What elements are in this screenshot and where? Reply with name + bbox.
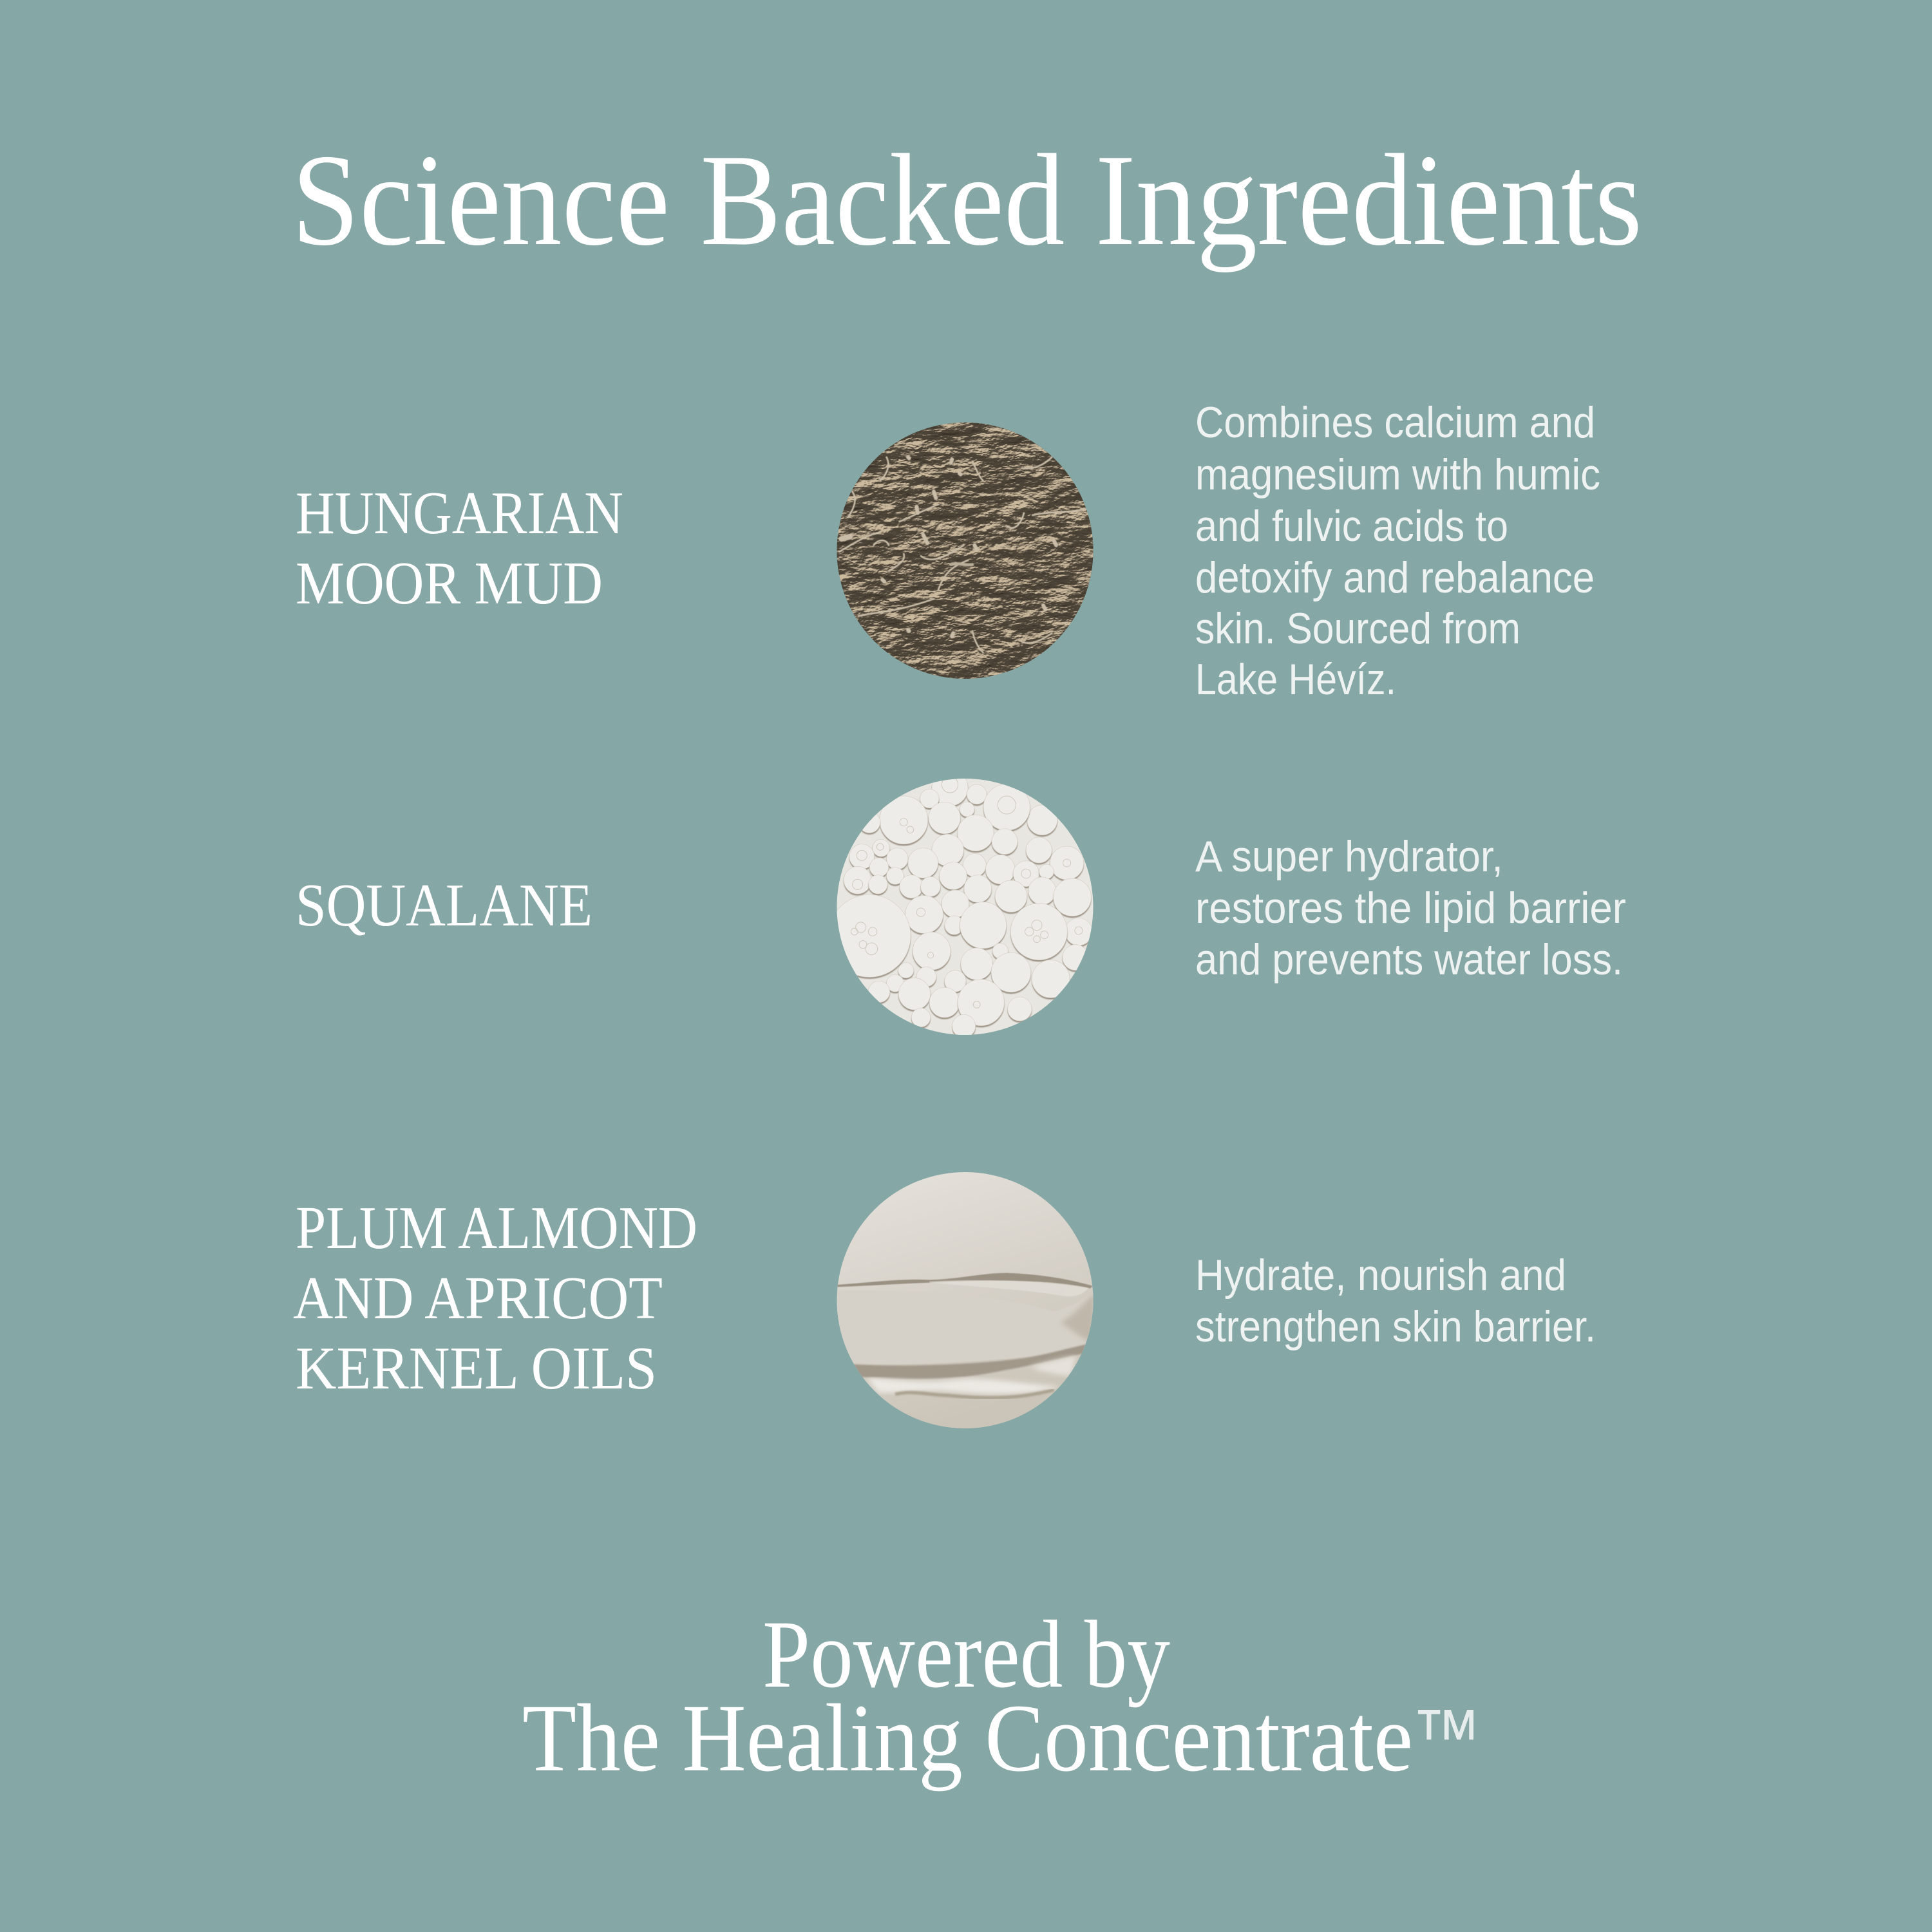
description: Hungarian moor mud bbox=[1195, 398, 1600, 704]
label: Plum almond and apricot kernel oils: KERNEL OILS bbox=[296, 1335, 657, 1402]
label: Hungarian moor mud bbox=[296, 480, 623, 617]
description: Squalane bbox=[1195, 832, 1626, 984]
label: Plum almond and apricot kernel oils: AND APRICOT bbox=[293, 1265, 663, 1332]
footer heading: ™ bbox=[1412, 1693, 1481, 1781]
description: oils bbox=[1195, 1251, 1596, 1351]
footer heading: Powered by bbox=[762, 1601, 1170, 1708]
description: Squalane: restores the lipid barrier bbox=[1195, 884, 1626, 933]
description: oils: strengthen skin barrier. bbox=[1195, 1302, 1596, 1351]
description: Hungarian moor mud: magnesium with humic bbox=[1195, 450, 1600, 499]
label: Plum almond and apricot kernel oils bbox=[293, 1195, 697, 1402]
image: mud texture circle bbox=[834, 420, 1096, 682]
label: Squalane: SQUALANE bbox=[296, 872, 592, 939]
footer heading: The Healing Concentrate bbox=[522, 1685, 1413, 1792]
description: oils: Hydrate, nourish and bbox=[1195, 1251, 1566, 1300]
description: Hungarian moor mud: Combines calcium and bbox=[1195, 398, 1595, 447]
row: Hungarian moor mud bbox=[296, 398, 1600, 704]
label: Plum almond and apricot kernel oils: PLUM ALMOND bbox=[296, 1195, 697, 1262]
row: Plum almond and apricot kernel oils bbox=[293, 1169, 1596, 1431]
description: Hungarian moor mud: detoxify and rebalance bbox=[1195, 553, 1595, 602]
image: oil surface circle bbox=[834, 1169, 1096, 1431]
title: Science Backed Ingredients bbox=[292, 128, 1642, 273]
description: Squalane: and prevents water loss. bbox=[1195, 935, 1623, 984]
row: Squalane bbox=[296, 770, 1626, 1038]
label: Hungarian moor mud: MOOR MUD bbox=[296, 550, 603, 617]
description: Hungarian moor mud: skin. Sourced from bbox=[1195, 604, 1520, 653]
description: Hungarian moor mud: Lake Hévíz. bbox=[1195, 655, 1396, 704]
label: Hungarian moor mud: HUNGARIAN bbox=[296, 480, 623, 547]
description: Hungarian moor mud: and fulvic acids to bbox=[1195, 502, 1508, 551]
image: oil bubbles circle bbox=[828, 770, 1096, 1038]
footer heading bbox=[522, 1601, 1481, 1792]
description: Squalane: A super hydrator, bbox=[1195, 832, 1503, 881]
